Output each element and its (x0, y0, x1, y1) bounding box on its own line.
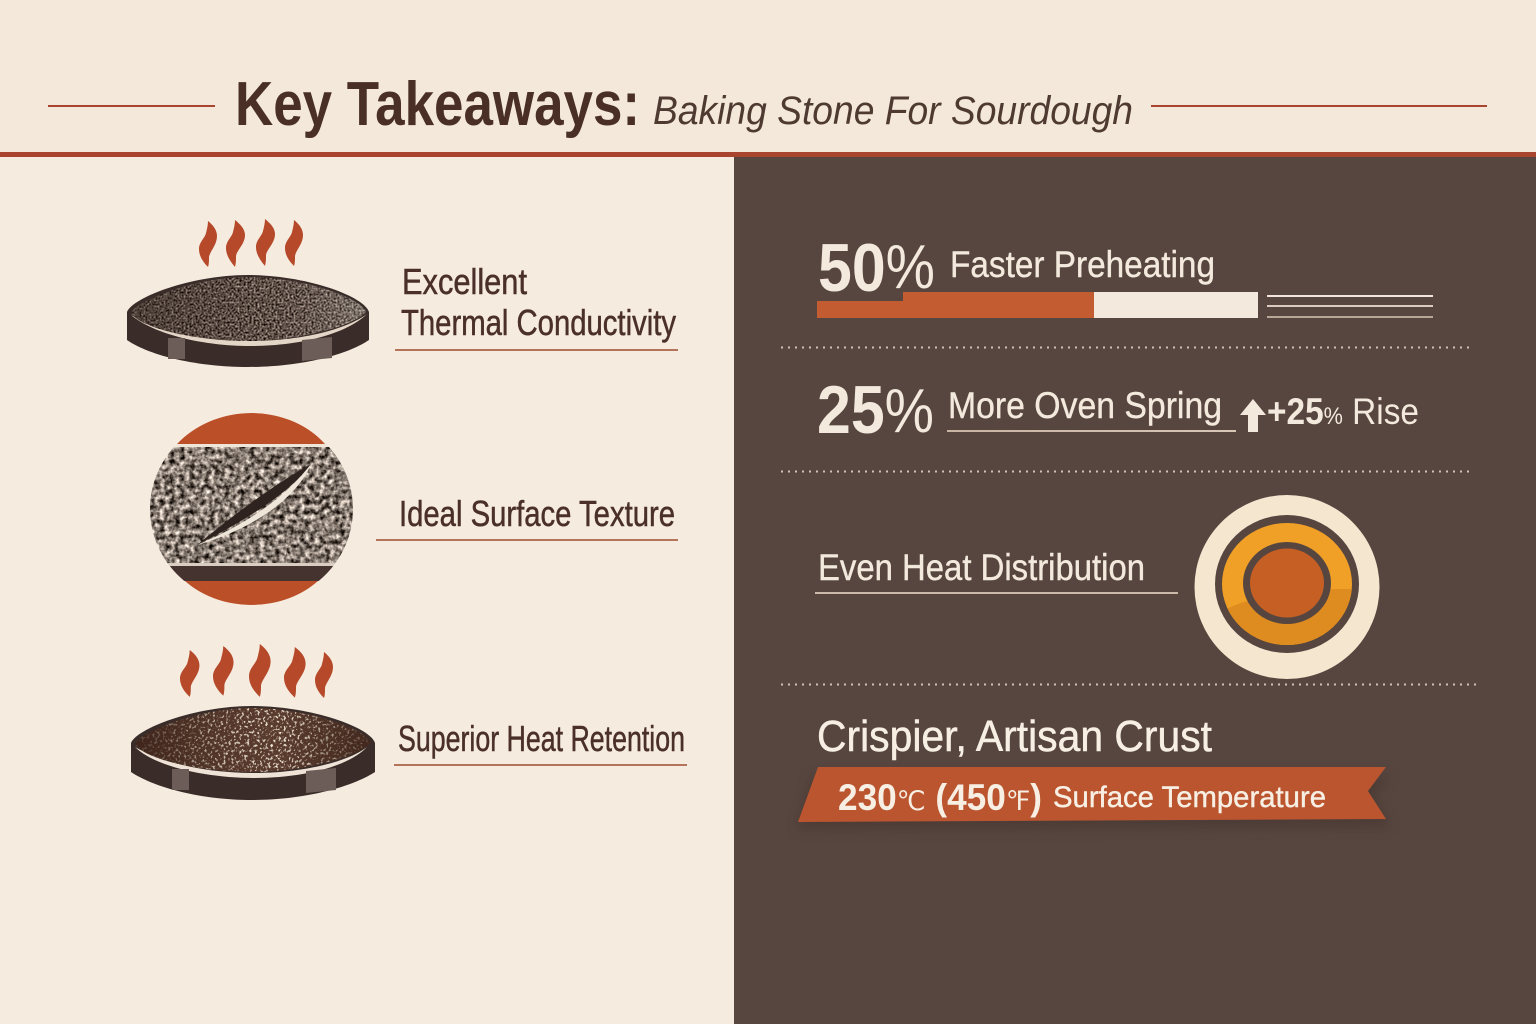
subtitle: Baking Stone For Sourdough (653, 89, 1133, 133)
icon: concentric heat target (1194, 495, 1380, 679)
underline (376, 539, 678, 541)
label: Even Heat Distribution (818, 547, 1145, 588)
rise label: +25% Rise (1267, 391, 1419, 432)
title: Key Takeaways: (235, 70, 640, 139)
item: superior heat retention (131, 644, 687, 800)
figure: 25%: % (885, 377, 934, 446)
stat: 50% faster preheating (817, 230, 1433, 318)
progress bar (817, 292, 1258, 318)
figure: 50%: % (886, 233, 935, 302)
icon: brown speckled stone (131, 704, 375, 800)
caption: Surface Temperature (1053, 781, 1326, 814)
ribbon banner (796, 767, 1392, 830)
underline (815, 592, 1178, 594)
icon: heat flames above stone (180, 644, 333, 698)
item: ideal surface texture (150, 413, 678, 605)
label: Faster Preheating (950, 244, 1215, 285)
label: Superior Heat Retention (398, 718, 685, 759)
icon: stone surface close-up with score (150, 413, 354, 605)
item: excellent thermal conductivity (127, 219, 678, 367)
stat: crispier artisan crust (796, 712, 1392, 830)
figure: 50%: 50 (818, 230, 894, 306)
underline (394, 764, 687, 766)
icon: heat flames above stone (199, 219, 303, 267)
header band (0, 0, 1536, 157)
right panel background (734, 157, 1536, 1024)
temperature: 230℃ (450℉) (838, 777, 1042, 818)
label: More Oven Spring (948, 385, 1222, 426)
left panel background (0, 157, 734, 1024)
icon: grey baking stone (127, 273, 371, 367)
underline (395, 349, 678, 351)
label: Ideal Surface Texture (399, 493, 675, 534)
icon: up arrow (1240, 399, 1266, 432)
label line 2: Thermal Conductivity (401, 302, 676, 343)
heading: Crispier, Artisan Crust (817, 712, 1212, 761)
stat: even heat distribution (815, 495, 1380, 679)
label: Excellent (402, 261, 527, 302)
underline (947, 430, 1236, 432)
bar side lines (1267, 295, 1433, 318)
stat: 25% more oven spring (817, 372, 1419, 448)
figure: 25%: 25 (817, 372, 893, 448)
